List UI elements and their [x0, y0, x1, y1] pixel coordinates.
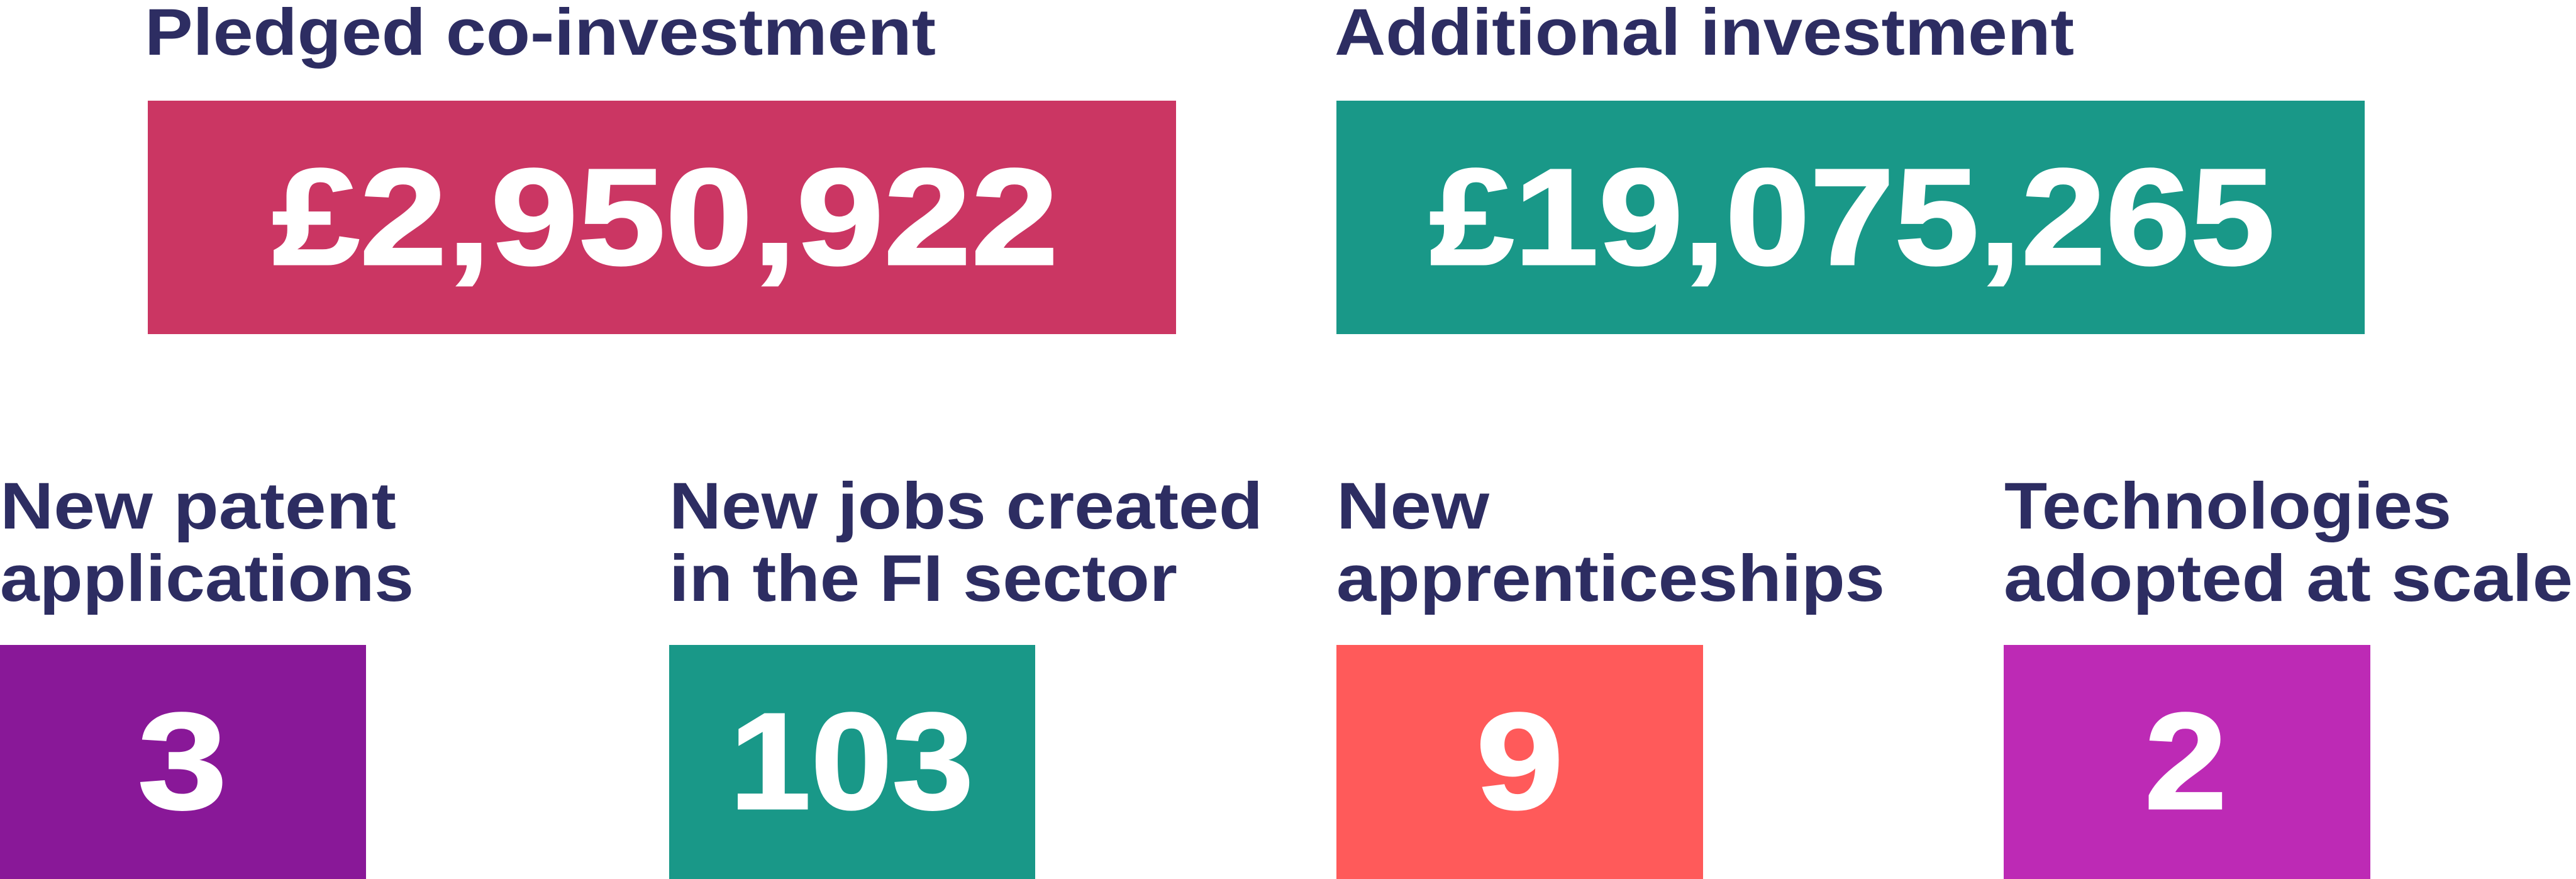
heading: technologies adopted at scale: adopted at scale — [2004, 542, 2573, 615]
panel: new apprenticeships — [1336, 469, 1885, 879]
panel: pledged co-investment — [145, 0, 1176, 334]
heading: technologies adopted at scale: Technologies — [2004, 469, 2451, 543]
value box: apprenticeships — [1336, 645, 1703, 879]
heading: new apprenticeships: apprenticeships — [1336, 542, 1885, 615]
value box: jobs: 103 — [730, 685, 974, 838]
heading: new patent applications: New patent — [0, 469, 396, 543]
panel: new patent applications — [0, 469, 414, 879]
heading: new patent applications: applications — [0, 542, 414, 615]
panel: new jobs created — [669, 469, 1263, 879]
value box: technologies — [2004, 645, 2370, 879]
value box: pledged amount: £2,950,922 — [272, 141, 1058, 294]
heading: new jobs created in the FI sector: in the FI sector — [669, 542, 1177, 615]
heading: new apprenticeships: New — [1336, 469, 1489, 543]
panel: additional investment — [1335, 0, 2365, 334]
value box: technologies: 2 — [2145, 685, 2227, 838]
value box: pledged amount — [148, 101, 1176, 334]
value box: apprenticeships: 9 — [1476, 685, 1563, 838]
value box: additional amount: £19,075,265 — [1430, 141, 2275, 294]
heading: new jobs created in the FI sector: New jobs created — [669, 469, 1263, 543]
panel: technologies adopted at scale — [2004, 469, 2573, 879]
value box: additional amount — [1336, 101, 2365, 334]
value box: patents: 3 — [138, 685, 227, 838]
value box: jobs — [669, 645, 1035, 879]
value box: patents — [0, 645, 366, 879]
